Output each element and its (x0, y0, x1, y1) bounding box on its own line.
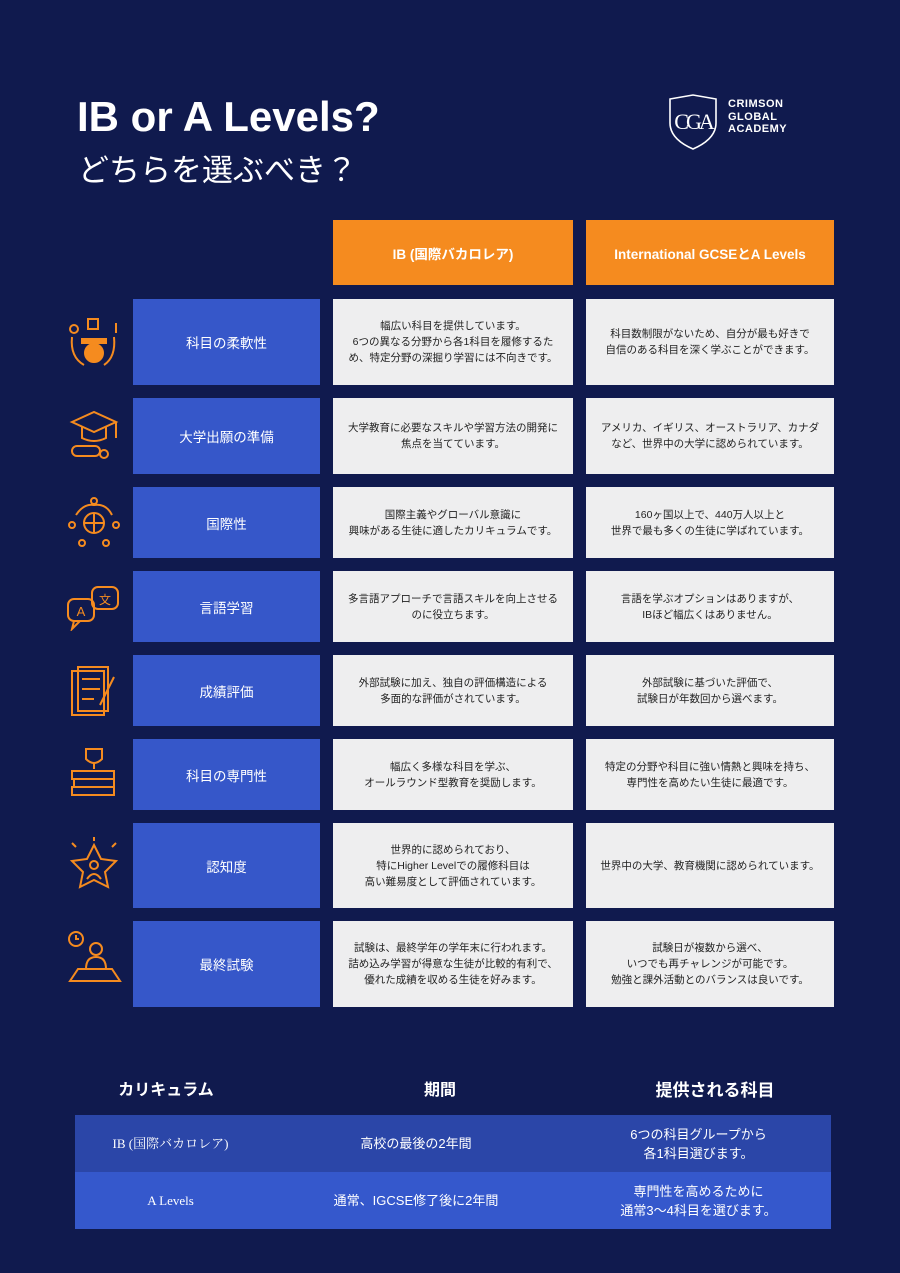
label (133, 655, 320, 726)
icon: translate bubbles: 文 (99, 593, 111, 607)
bottom row: IB: IB (国際バカロレア) (113, 1136, 228, 1151)
label: 言語学習 (200, 600, 254, 616)
A level cell: 科目数制限がないため、自分が最も好きで (610, 328, 810, 340)
title: IB or A Levels? (77, 93, 380, 140)
logo (669, 94, 787, 150)
IB cell (333, 921, 573, 1007)
icon: translate bubbles (67, 586, 119, 631)
A level cell (586, 921, 834, 1007)
label: 科目の柔軟性 (186, 336, 267, 351)
IB cell (333, 655, 573, 726)
A level cell (586, 823, 834, 908)
icon: globe people (68, 497, 120, 547)
A level cell: 自信のある科目を深く学ぶことができます。 (606, 344, 814, 356)
label: 国際性 (206, 516, 247, 532)
icon: translate bubbles: A (77, 604, 86, 619)
A level cell: 外部試験に基づいた評価で、 (642, 676, 778, 688)
logo: ACADEMY (728, 123, 787, 135)
A level cell (586, 299, 834, 385)
label: 最終試験 (200, 958, 254, 973)
IB cell (333, 487, 573, 558)
logo: GLOBAL (728, 110, 777, 122)
IB cell: 焦点を当てています。 (401, 438, 505, 450)
row 6 (71, 739, 834, 810)
bottom row: A Levels: 通常、IGCSE修了後に2年間 (334, 1193, 498, 1208)
bottom row: IB: 各1科目選びます。 (644, 1146, 753, 1160)
A level cell: 専門性を高めたい生徒に最適です。 (627, 776, 793, 788)
A level cell: 言語を学ぶオプションはありますが、 (621, 592, 799, 604)
icon: star person (70, 837, 118, 889)
label: 認知度 (206, 860, 247, 874)
IB cell: 特にHigher Levelでの履修科目は (376, 860, 530, 872)
IB cell: 多面的な評価がされています。 (380, 692, 526, 704)
header: IB: IB (国際バカロレア) (393, 246, 513, 262)
icon: graduation cap (70, 410, 118, 459)
A level cell: 勉強と課外活動とのバランスは良いです。 (611, 974, 809, 986)
IB cell: のに役立ちます。 (412, 608, 494, 620)
A level cell: など、世界中の大学に認められています。 (611, 438, 809, 450)
IB cell: 試験は、最終学年の学年末に行われます。 (354, 942, 552, 954)
A level cell: 160ヶ国以上で、440万人以上と (635, 508, 785, 520)
subtitle: どちらを選ぶべき？ (78, 153, 357, 188)
A level cell: いつでも再チャレンジが可能です。 (627, 958, 793, 970)
A level cell: IBほど幅広くはありません。 (642, 608, 778, 620)
bottom table header: curriculum: カリキュラム (118, 1082, 214, 1099)
A level cell: 試験日が複数から選べ、 (652, 942, 768, 954)
IB cell: 大学教育に必要なスキルや学習方法の開発に (348, 422, 558, 434)
icon: student at desk (68, 931, 122, 982)
IB cell (333, 571, 573, 642)
IB cell: 世界的に認められており、 (391, 844, 515, 856)
IB cell: 外部試験に加え、独自の評価構造による (359, 676, 547, 688)
bottom row: A Levels (75, 1172, 831, 1229)
A level cell: 世界で最も多くの生徒に学ばれています。 (611, 524, 809, 536)
label (133, 921, 320, 1007)
IB cell (333, 739, 573, 810)
label (133, 823, 320, 908)
IB cell: 優れた成績を収める生徒を好みます。 (364, 974, 542, 986)
row 2 (70, 398, 834, 474)
IB cell: 多言語アプローチで言語スキルを向上させる (348, 592, 558, 604)
A level cell (586, 571, 834, 642)
row 7 (70, 823, 834, 908)
IB cell: め、特定分野の深掘り学習には不向きです。 (349, 352, 557, 364)
logo: CGA (674, 109, 715, 134)
row 3 (68, 487, 834, 558)
bottom row: IB: 6つの科目グループから (630, 1126, 767, 1142)
A level cell: 世界中の大学、教育機関に認められています。 (600, 860, 820, 872)
label: 成績評価 (200, 684, 254, 700)
IB cell (333, 299, 573, 385)
IB cell: オールラウンド型教育を奨励します。 (364, 776, 542, 788)
A level cell: アメリカ、イギリス、オーストラリア、カナダ (601, 422, 819, 434)
A level cell (586, 398, 834, 474)
label (133, 487, 320, 558)
header: A Levels (586, 220, 834, 285)
IB cell: 詰め込み学習が得意な生徒が比較的有利で、 (348, 958, 558, 970)
label (133, 739, 320, 810)
IB cell: 6つの異なる分野から各1科目を履修するた (353, 336, 553, 348)
IB cell: 興味がある生徒に適したカリキュラムです。 (349, 524, 557, 536)
IB cell: 高い難易度として評価されています。 (365, 876, 541, 888)
A level cell: 試験日が年数回から選べます。 (637, 692, 783, 704)
label (133, 571, 320, 642)
A level cell (586, 655, 834, 726)
icon: trophy books (71, 748, 115, 796)
label: 科目の専門性 (186, 768, 267, 784)
row 4 (67, 571, 834, 642)
IB cell: 幅広い科目を提供しています。 (380, 320, 526, 332)
header: IB (333, 220, 573, 285)
row 5 (71, 655, 834, 726)
header: A Levels: International GCSEとA Levels (614, 246, 806, 262)
bottom row: A Levels: 通常3〜4科目を選びます。 (620, 1202, 777, 1218)
A level cell (586, 487, 834, 558)
bottom row: A Levels: 専門性を高めるために (633, 1184, 764, 1198)
row 1 (69, 299, 834, 385)
IB cell (333, 398, 573, 474)
IB cell: 幅広く多様な科目を学ぶ、 (390, 760, 516, 772)
logo: CRIMSON (728, 98, 783, 110)
IB cell (333, 823, 573, 908)
bottom row: IB (75, 1115, 831, 1172)
icon: person (69, 318, 117, 366)
label: 大学出願の準備 (179, 430, 274, 445)
bottom row: A Levels: A Levels (147, 1193, 194, 1208)
bottom table header: period: 期間 (424, 1082, 456, 1099)
bottom table header: subjects: 提供される科目 (656, 1081, 774, 1100)
A level cell (586, 739, 834, 810)
label (133, 299, 320, 385)
icon: checklist (71, 666, 115, 716)
bottom row: IB: 高校の最後の2年間 (360, 1136, 472, 1151)
A level cell: 特定の分野や科目に強い情熱と興味を持ち、 (605, 760, 815, 772)
row 8 (68, 921, 834, 1007)
label (133, 398, 320, 474)
IB cell: 国際主義やグローバル意識に (385, 508, 521, 520)
